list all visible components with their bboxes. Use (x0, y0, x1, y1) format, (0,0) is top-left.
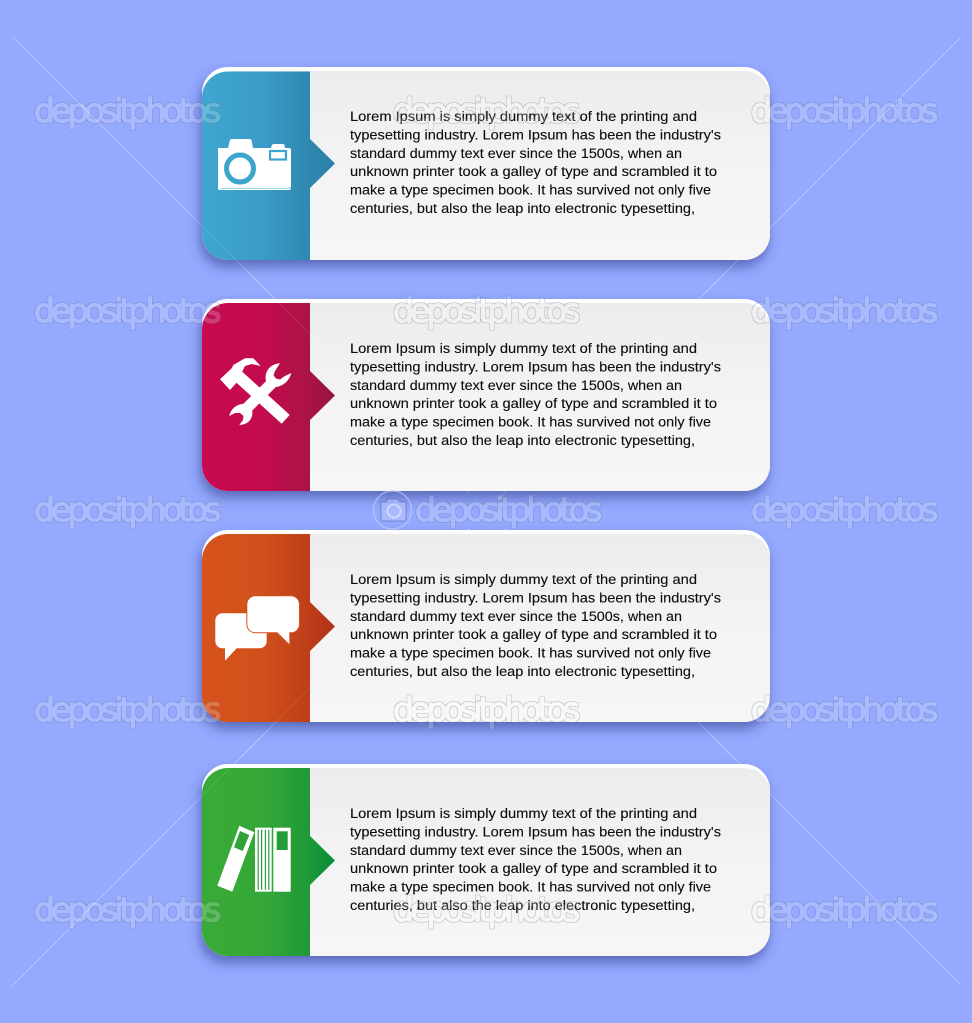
watermarks: depositphotos (751, 890, 937, 929)
card 3 surface (202, 530, 770, 722)
card 1 text (350, 109, 721, 217)
watermarks: depositphotos (751, 91, 937, 130)
icon: books (217, 826, 291, 892)
card 3 text (350, 572, 721, 680)
card 3 text: standard dummy text ever since the 1500s, when an (350, 609, 682, 625)
card 4: books (202, 764, 770, 956)
card 1: camera (202, 67, 770, 260)
watermarks: depositphotos (393, 91, 579, 130)
card 2 text: centuries, but also the leap into electronic typesetting, (350, 433, 695, 449)
card 2 surface (202, 299, 770, 491)
watermarks: depositphotos (751, 490, 937, 529)
card 2 text: Lorem Ipsum is simply dummy text of the printing and (350, 341, 697, 357)
card 3 text: typesetting industry. Lorem Ipsum has been the industry's (350, 590, 721, 606)
card 1 text: standard dummy text ever since the 1500s, when an (350, 146, 682, 162)
card 4 text (350, 806, 721, 914)
watermarks: depositphotos (415, 490, 601, 529)
watermarks: depositphotos (751, 690, 937, 729)
card 1 surface (202, 67, 770, 260)
card 1 text: make a type specimen book. It has survived not only five (350, 183, 711, 199)
card 4 text: Lorem Ipsum is simply dummy text of the printing and (350, 806, 697, 822)
watermarks: depositphotos (393, 690, 579, 729)
card 1 text: Lorem Ipsum is simply dummy text of the printing and (350, 109, 697, 125)
card 2: tools (202, 299, 770, 491)
watermarks: depositphotos (34, 291, 220, 330)
watermarks: depositphotos (34, 490, 220, 529)
watermark logo (374, 491, 412, 529)
watermarks: depositphotos (34, 91, 220, 130)
card 4 text: unknown printer took a galley of type and scrambled it to (350, 861, 717, 877)
card 1 colour tab (202, 72, 335, 260)
card 2 text (350, 341, 721, 449)
card 3 text: unknown printer took a galley of type and scrambled it to (350, 627, 717, 643)
card 3 colour tab (202, 534, 335, 722)
card 4 text: standard dummy text ever since the 1500s, when an (350, 843, 682, 859)
watermarks (34, 91, 937, 929)
card 3 text: centuries, but also the leap into electronic typesetting, (350, 664, 695, 680)
card 2 text: typesetting industry. Lorem Ipsum has been the industry's (350, 359, 721, 375)
icon: camera (218, 139, 291, 190)
watermarks: depositphotos (393, 291, 579, 330)
card 3 text: Lorem Ipsum is simply dummy text of the printing and (350, 572, 697, 588)
card 1 text: typesetting industry. Lorem Ipsum has been the industry's (350, 127, 721, 143)
watermark diagonal lines over cards (202, 226, 770, 796)
watermarks: depositphotos (393, 890, 579, 929)
card 2 text: make a type specimen book. It has survived not only five (350, 415, 711, 431)
card 4 text: make a type specimen book. It has survived not only five (350, 880, 711, 896)
card 3 text: make a type specimen book. It has survived not only five (350, 646, 711, 662)
card 1 text: centuries, but also the leap into electronic typesetting, (350, 201, 695, 217)
card 1 text: unknown printer took a galley of type and scrambled it to (350, 164, 717, 180)
card 4 colour tab (202, 768, 335, 956)
card 4 text: centuries, but also the leap into electronic typesetting, (350, 898, 695, 914)
icon: hammer and wrench (220, 358, 291, 425)
icon: speech bubbles (215, 596, 299, 661)
watermarks: depositphotos (751, 291, 937, 330)
card 2 colour tab (202, 303, 335, 491)
card 3: speech bubbles (202, 530, 770, 722)
card 2 text: standard dummy text ever since the 1500s, when an (350, 378, 682, 394)
watermarks: depositphotos (34, 890, 220, 929)
card 4 text: typesetting industry. Lorem Ipsum has been the industry's (350, 824, 721, 840)
card 4 surface (202, 764, 770, 956)
card 2 text: unknown printer took a galley of type and scrambled it to (350, 396, 717, 412)
watermarks: depositphotos (34, 690, 220, 729)
